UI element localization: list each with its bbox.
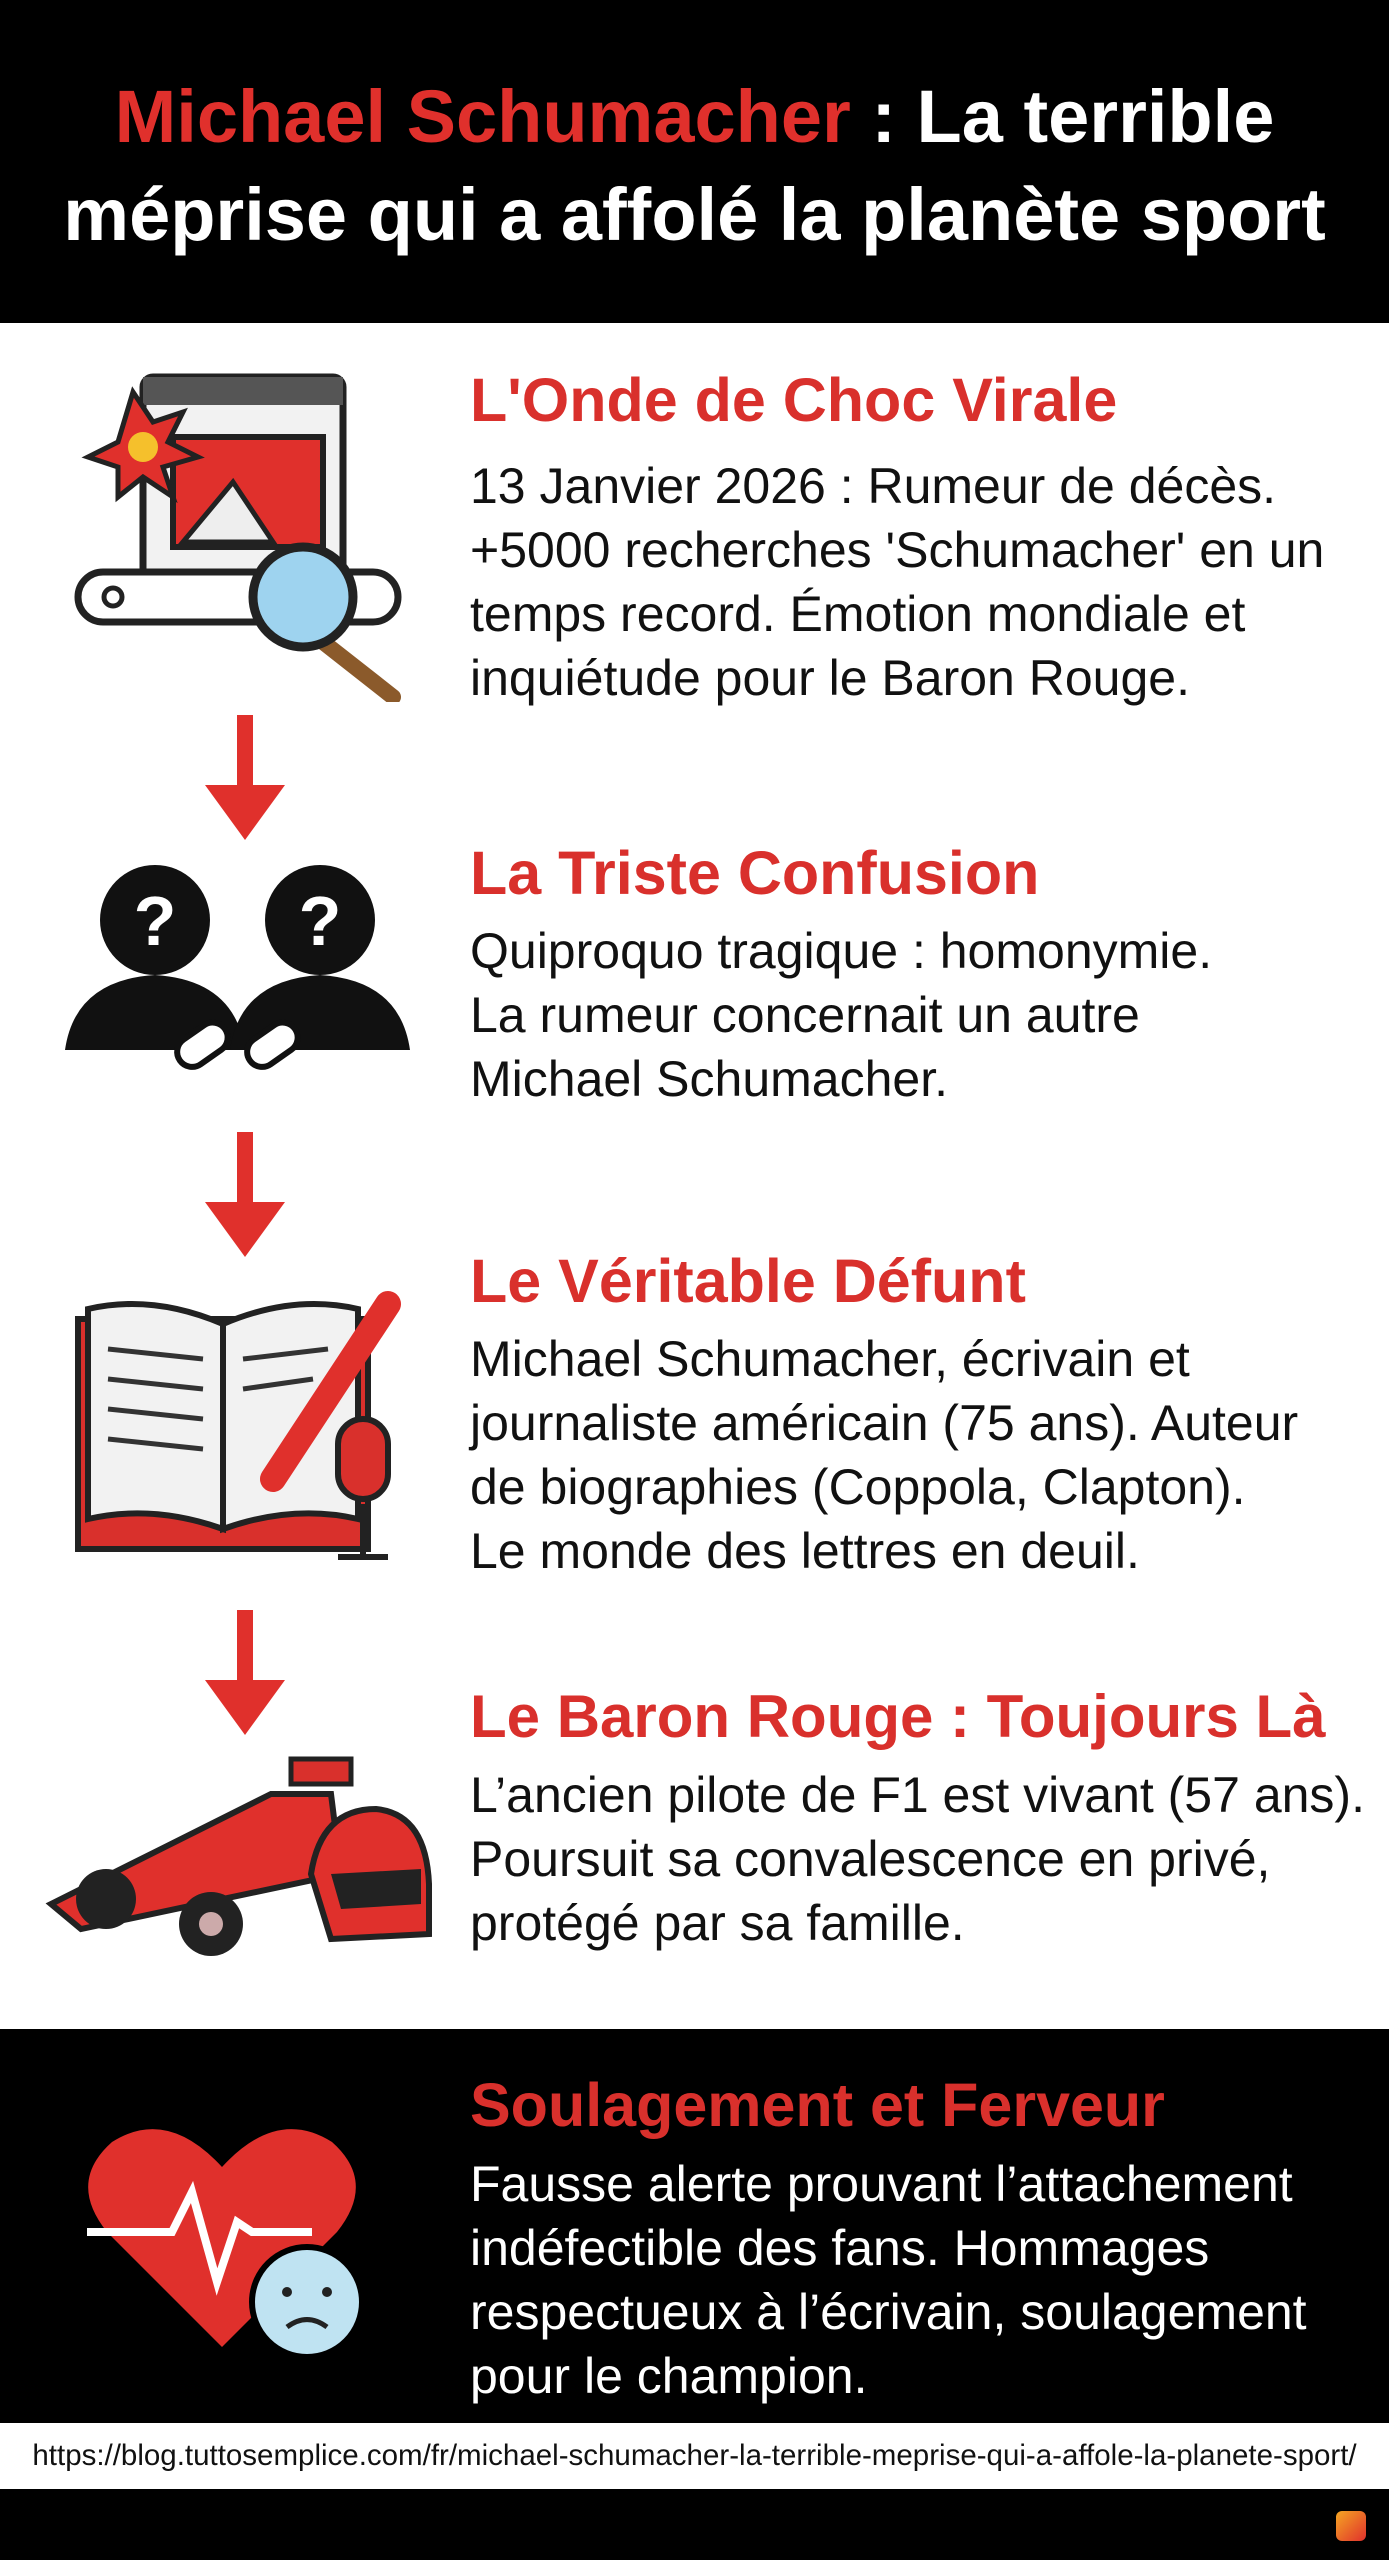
icon: F1 car and helmet xyxy=(46,1756,432,1956)
arrow 1 xyxy=(205,715,285,840)
header xyxy=(0,0,1389,323)
section 3 heading: Le Véritable Défunt xyxy=(470,1247,1026,1315)
footer text: Fausse alerte prouvant l’attachement xyxy=(470,2156,1293,2212)
section 3 text: Michael Schumacher, écrivain et xyxy=(470,1331,1190,1387)
icon: heart with pulse xyxy=(87,2129,359,2354)
arrow 2 xyxy=(205,1132,285,1257)
source url xyxy=(0,2423,1389,2489)
icon: browser search xyxy=(74,374,402,702)
section 2 heading: La Triste Confusion xyxy=(470,839,1039,907)
section 1 text xyxy=(470,458,1324,706)
section 4 heading: Le Baron Rouge : Toujours Là xyxy=(470,1683,1326,1750)
bottom bar xyxy=(0,2489,1389,2560)
footer text: indéfectible des fans. Hommages xyxy=(470,2220,1209,2276)
section 3 text xyxy=(468,1331,1298,1579)
section 4 text: L’ancien pilote de F1 est vivant (57 ans). xyxy=(470,1767,1365,1823)
source url: https://blog.tuttosemplice.com/fr/michael-schumacher-la-terrible-meprise-qui-a-affole-la-planete-sport/ xyxy=(32,2439,1357,2472)
icon: book pen microphone xyxy=(75,1291,401,1560)
title: méprise qui a affolé la planète sport xyxy=(63,173,1326,256)
logo xyxy=(1336,2511,1366,2541)
section 1 heading: L'Onde de Choc Virale xyxy=(470,366,1117,434)
section 4 text: protégé par sa famille. xyxy=(470,1895,965,1951)
footer text xyxy=(470,2156,1307,2404)
section 3 text: journaliste américain (75 ans). Auteur xyxy=(470,1395,1298,1451)
footer panel xyxy=(0,2029,1389,2423)
section 1 text: 13 Janvier 2026 : Rumeur de décès. xyxy=(470,458,1276,514)
section 3 text: de biographies (Coppola, Clapton). xyxy=(470,1459,1246,1515)
section 1 text: +5000 recherches 'Schumacher' en un xyxy=(470,522,1324,578)
icon: two silhouettes xyxy=(65,865,410,1070)
section 2 text: La rumeur concernait un autre xyxy=(470,987,1140,1043)
title: Michael Schumacher : La terrible xyxy=(115,75,1274,158)
section 4 text: Poursuit sa convalescence en privé, xyxy=(470,1831,1270,1887)
section 2 text: Michael Schumacher. xyxy=(470,1051,948,1107)
footer text: respectueux à l’écrivain, soulagement xyxy=(470,2284,1307,2340)
footer heading: Soulagement et Ferveur xyxy=(470,2071,1165,2139)
section 4 text xyxy=(470,1767,1365,1951)
footer text: pour le champion. xyxy=(470,2348,867,2404)
section 3 text: Le monde des lettres en deuil. xyxy=(470,1523,1140,1579)
arrow 3 xyxy=(205,1610,285,1735)
icon: two silhouettes: ? xyxy=(299,882,341,960)
section 2 text: Quiproquo tragique : homonymie. xyxy=(470,923,1212,979)
section 2 text xyxy=(470,923,1212,1107)
section 1 text: inquiétude pour le Baron Rouge. xyxy=(470,650,1190,706)
icon: two silhouettes: ? xyxy=(134,882,176,960)
section 1 text: temps record. Émotion mondiale et xyxy=(470,586,1245,642)
title xyxy=(63,75,1326,256)
